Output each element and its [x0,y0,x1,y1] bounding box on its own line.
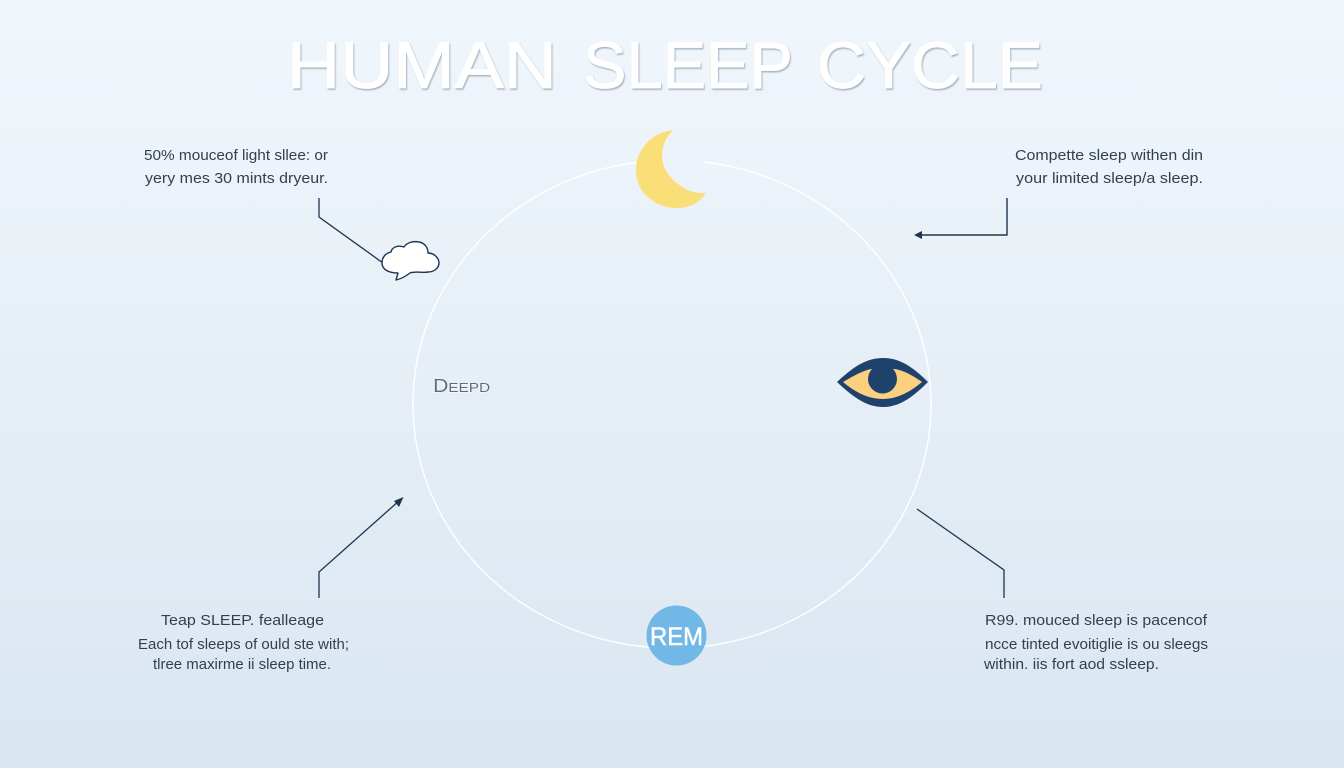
callout text: bottom right [983,613,1208,673]
arrow: top right [914,198,1007,239]
connector: top left to cloud [319,198,383,263]
connector: bottom right [917,509,1004,598]
callout text: bottom left: tlree maxirme ii sleep time. [153,657,331,673]
arrow: bottom left [319,497,404,598]
callout text: bottom right: R99. mouced sleep is pacencof [985,613,1208,629]
title: SLEEP [583,28,793,102]
callout text: top right [1015,148,1203,187]
callout text: bottom left [138,613,349,673]
callout text: top right: your limited sleep/a sleep. [1016,171,1203,187]
icon: crescent moon [636,130,706,208]
REM badge: REM [650,623,703,651]
title: HUMAN [287,28,557,102]
sleep cycle ring [413,162,931,648]
callout text: top left [144,148,328,187]
Deep stage label: Deepd [433,376,490,396]
title: CYCLE [817,28,1043,102]
callout text: top right: Compette sleep withen din [1015,148,1203,164]
icon: eye [837,358,928,407]
callout text: bottom right: within. iis fort aod ssleep. [983,657,1159,673]
callout text: bottom right: ncce tinted evoitiglie is ou sleegs [985,637,1208,653]
callout text: top left: 50% mouceof light sllee: or [144,148,328,164]
callout text: bottom left: Each tof sleeps of ould ste with; [138,637,349,653]
callout text: top left: yery mes 30 mints dryeur. [145,171,328,187]
title [287,28,1043,102]
callout text: bottom left: Teap SLEEP. fealleage [161,613,324,629]
REM badge [646,606,706,666]
icon: cloud [382,242,439,280]
